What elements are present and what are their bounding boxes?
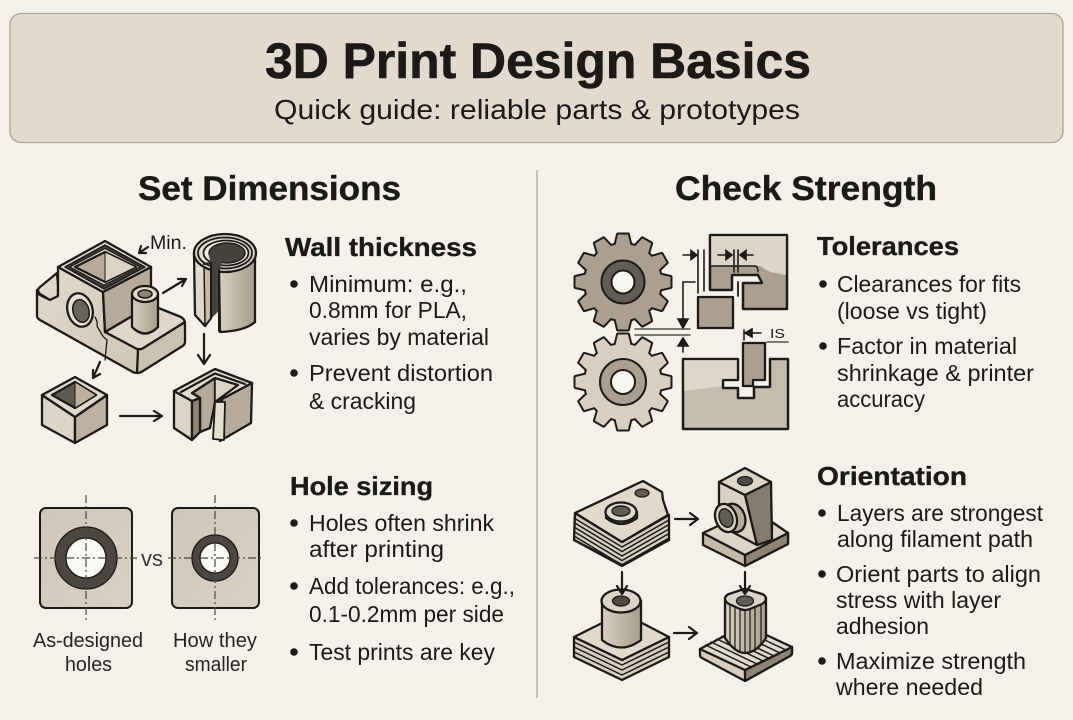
- dimension arrows: [635, 250, 788, 352]
- text block: hole sizing: Holes often shrink: [309, 510, 494, 536]
- text block: wall thickness: & cracking: [309, 388, 416, 414]
- text block: tolerances: (loose vs tight): [837, 298, 987, 324]
- text block: tolerances: shrinkage & printer: [837, 360, 1034, 386]
- caption: how they smaller: [173, 629, 258, 676]
- caption: as-designed holes: [33, 629, 143, 676]
- fit: lower joint: [683, 343, 788, 429]
- caption: as-designed holes: As-designed: [33, 629, 143, 652]
- text block: orientation: Orient parts to align: [836, 561, 1041, 587]
- title: 3D Print Design Basics: [265, 33, 811, 89]
- text block: orientation: Layers are strongest: [837, 500, 1044, 526]
- gear: upper: [576, 234, 670, 330]
- label: vs: vs: [141, 546, 163, 571]
- label: IS: IS: [770, 326, 785, 341]
- text block: orientation: Maximize strength: [836, 648, 1026, 674]
- text block: tolerances: Tolerances: [817, 231, 959, 261]
- printed smaller hole: [168, 495, 264, 622]
- text block: hole sizing: 0.1-0.2mm per side: [309, 601, 504, 627]
- as-designed hole: [34, 495, 137, 622]
- subtitle: Quick guide: reliable parts & prototypes: [274, 94, 800, 125]
- caption: as-designed holes: holes: [65, 653, 112, 676]
- arrows between orientation parts: [617, 513, 750, 639]
- fit: upper joint: [698, 235, 787, 328]
- label: Min.: Min.: [150, 233, 187, 254]
- text block: wall thickness: [285, 232, 493, 414]
- text block: hole sizing: [290, 471, 515, 665]
- icon: split cylinder: [194, 234, 256, 332]
- text block: orientation: adhesion: [836, 613, 929, 639]
- text block: hole sizing: Test prints are key: [309, 639, 495, 665]
- text block: orientation: along filament path: [837, 526, 1033, 552]
- text block: hole sizing: Hole sizing: [290, 471, 433, 501]
- caption: how they smaller: How they: [173, 629, 258, 652]
- text block: orientation: [817, 461, 1044, 700]
- text block: hole sizing: after printing: [309, 536, 444, 562]
- text block: tolerances: accuracy: [837, 386, 925, 412]
- text block: tolerances: Clearances for fits: [837, 271, 1021, 297]
- text block: orientation: stress with layer: [836, 587, 1001, 613]
- text block: orientation: where needed: [835, 674, 983, 700]
- heading: Check Strength: Check Strength: [675, 170, 937, 208]
- text block: wall thickness: Prevent distortion: [309, 360, 493, 386]
- text block: wall thickness: Wall thickness: [285, 232, 477, 262]
- text block: tolerances: Factor in material: [837, 333, 1017, 359]
- icon: gears and tolerance fits: [576, 234, 788, 430]
- icon: main block: [37, 241, 185, 373]
- text block: tolerances: [817, 231, 1034, 412]
- caption: how they smaller: smaller: [185, 653, 247, 676]
- icon: wall thickness diagrams: [37, 233, 256, 443]
- text block: wall thickness: 0.8mm for PLA,: [309, 297, 467, 323]
- part: layered base with cylinder: [574, 590, 669, 680]
- icon: cracked box: [174, 369, 252, 441]
- arrows between parts: [93, 246, 210, 421]
- gear: lower: [576, 334, 670, 430]
- text block: orientation: Orientation: [817, 461, 967, 491]
- heading: Set Dimensions: Set Dimensions: [138, 170, 401, 208]
- part: upright bracket: [703, 468, 788, 566]
- part: ribbed column on base: [700, 589, 792, 681]
- icon: orientation parts: [574, 468, 792, 681]
- part: layered plate with boss: [574, 481, 669, 566]
- icon: hole comparison: [33, 495, 264, 676]
- text block: wall thickness: Minimum: e.g.,: [309, 271, 467, 297]
- title banner: [10, 14, 1063, 142]
- text block: wall thickness: varies by material: [309, 324, 489, 350]
- text block: hole sizing: Add tolerances: e.g.,: [309, 573, 515, 599]
- icon: hollow cube: [42, 377, 107, 443]
